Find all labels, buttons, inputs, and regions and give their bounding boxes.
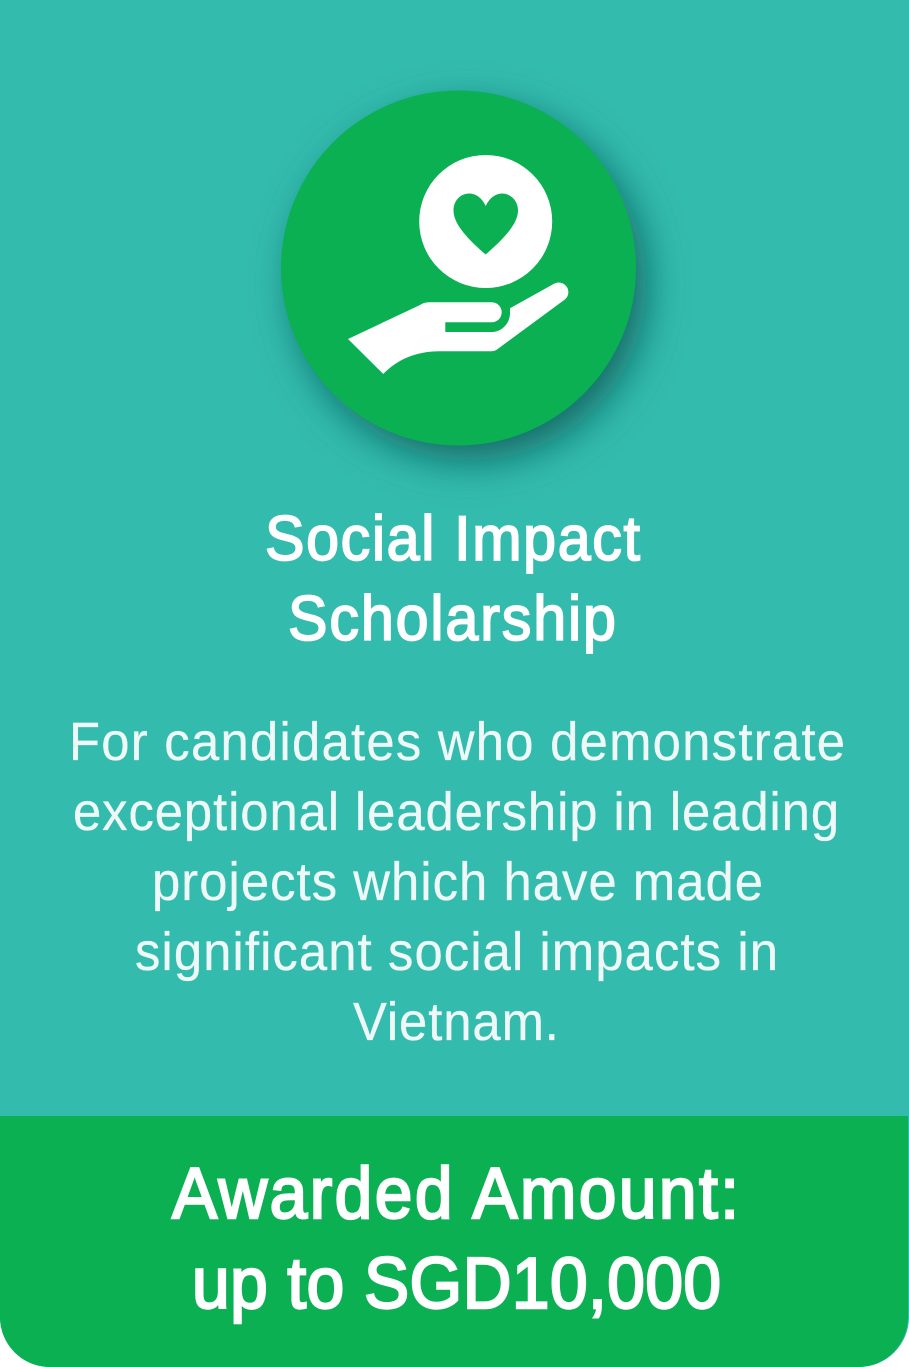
description text: [69, 713, 845, 1052]
amount text: [172, 1153, 739, 1323]
badge circle: [281, 90, 636, 446]
description text: projects which have made: [152, 853, 763, 912]
title: Social Impact: [265, 503, 640, 573]
description text: For candidates who demonstrate: [69, 713, 845, 772]
heart: [454, 194, 518, 254]
description text: exceptional leadership in leading: [73, 783, 839, 842]
description text: Vietnam.: [353, 993, 559, 1052]
amount background: [0, 1116, 908, 1367]
hand: [348, 283, 568, 374]
description text: significant social impacts in: [135, 923, 778, 982]
badge shadow: [294, 108, 646, 460]
panel: awarded amount: [0, 1116, 908, 1367]
title: [265, 503, 640, 653]
title: Scholarship: [288, 583, 616, 653]
icon: hand holding heart badge: [281, 90, 646, 460]
heart circle: [419, 155, 552, 288]
amount text: Awarded Amount:: [172, 1153, 739, 1233]
amount text: up to SGD10,000: [192, 1243, 721, 1323]
